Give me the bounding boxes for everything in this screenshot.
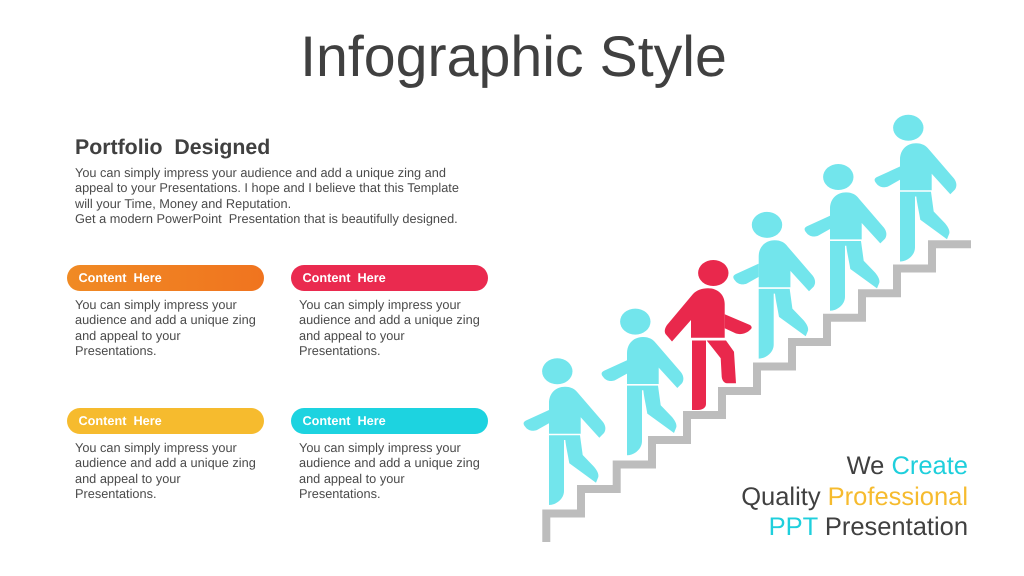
text block: cyan: Presentations. [299, 486, 381, 501]
figure 1 [524, 358, 605, 505]
text block: red [299, 297, 480, 358]
text block: cyan: and appeal to your [299, 471, 405, 486]
slogan: Quality Professional [741, 483, 968, 511]
pill: yellow heading: Content Here [78, 414, 162, 428]
figure 4 [733, 212, 815, 359]
text block: yellow: Presentations. [75, 486, 157, 501]
intro heading: Portfolio Designed [75, 135, 270, 159]
text block: red: Presentations. [299, 343, 381, 358]
text block: orange: and appeal to your [75, 328, 181, 343]
staircase [546, 244, 971, 542]
slogan: We Create [847, 452, 968, 480]
text block: orange: audience and add a unique zing [75, 312, 256, 327]
slogan [741, 452, 968, 541]
pill: cyan heading [291, 408, 488, 434]
pill: red heading: Content Here [302, 271, 386, 285]
figure 6 [875, 115, 956, 262]
slogan: PPT Presentation [769, 513, 968, 541]
text block: red: You can simply impress your [299, 297, 461, 312]
text block: yellow: You can simply impress your [75, 440, 237, 455]
text block: red: and appeal to your [299, 328, 405, 343]
text block: cyan: audience and add a unique zing [299, 455, 480, 470]
text block: cyan: You can simply impress your [299, 440, 461, 455]
pill: orange heading [67, 265, 264, 291]
pill: orange heading: Content Here [78, 271, 162, 285]
text block: orange: Presentations. [75, 343, 157, 358]
text block: yellow [75, 440, 256, 501]
text block: yellow: and appeal to your [75, 471, 181, 486]
text block: orange [75, 297, 256, 358]
pill: yellow heading [67, 408, 264, 434]
figure 2 [602, 309, 683, 455]
figure 3: highlighted red [665, 260, 752, 410]
pill: red heading [291, 265, 488, 291]
text block: red: audience and add a unique zing [299, 312, 480, 327]
pill: cyan heading: Content Here [302, 414, 386, 428]
intro text: You can simply impress your audience and add a unique zing and appeal to your Presentations. I hope and I believe that this Template will your Time, Money and Reputation. Get a modern PowerPoint Presentation that is beautifully designed. [75, 165, 459, 226]
title: Infographic Style [300, 25, 727, 89]
text block: orange: You can simply impress your [75, 297, 237, 312]
text block: yellow: audience and add a unique zing [75, 455, 256, 470]
text block: cyan [299, 440, 480, 501]
figure 5 [805, 164, 886, 311]
